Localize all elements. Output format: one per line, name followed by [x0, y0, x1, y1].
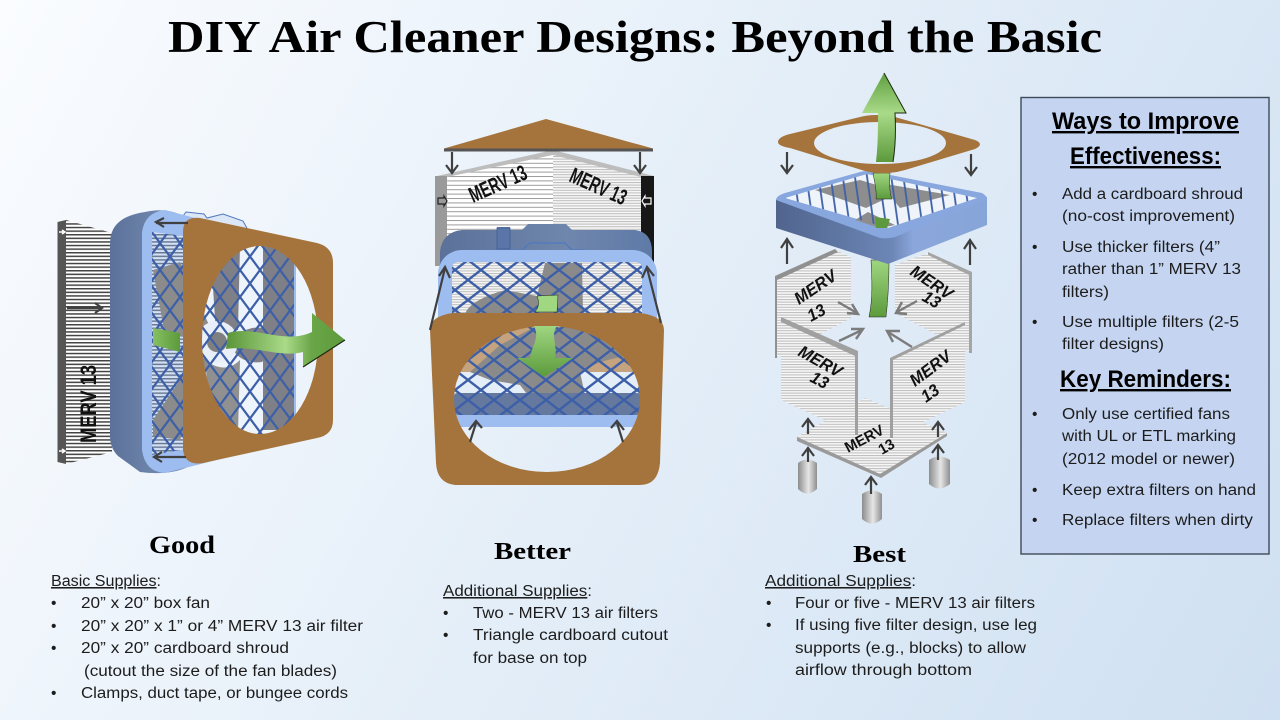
back left filter: MERV [791, 265, 842, 308]
leg supports [798, 456, 950, 524]
best supplies list: Four or five - MERV 13 air filters [795, 595, 1035, 612]
filter: MERV 13 single: MERV 13 [76, 365, 101, 443]
better supplies list: • [443, 605, 448, 622]
improvement list: (no-cost improvement) [1062, 208, 1235, 225]
best supplies list: • [766, 617, 771, 634]
airflow arrows [154, 218, 188, 462]
improvement list: Use thicker filters (4” [1062, 239, 1220, 256]
airflow arrows [430, 267, 661, 442]
good supplies list [51, 573, 363, 702]
back right filter: MERV [907, 262, 958, 304]
good supplies list: • [51, 685, 56, 702]
cardboard shroud [430, 313, 664, 485]
green arrow below fan [869, 260, 889, 317]
better supplies list: Two - MERV 13 air filters [473, 605, 658, 622]
good supplies list: 20” x 20” cardboard shroud [81, 640, 289, 657]
reminders list: Keep extra filters on hand [1062, 482, 1256, 499]
best design illustration [775, 73, 987, 524]
two v-shaped filters: MERV 13 [566, 163, 631, 210]
best supplies list: If using five filter design, use leg [795, 617, 1037, 634]
airflow arrows to fan and ring [781, 152, 977, 265]
improvement list: filter designs) [1062, 336, 1164, 353]
bottom filter: 13 [876, 436, 898, 458]
heading: key reminders: Key Reminders: [1060, 366, 1231, 393]
good supplies list: 20” x 20” box fan [81, 595, 210, 612]
reminders list: Only use certified fans [1062, 406, 1230, 423]
front left filter: MERV [795, 342, 847, 382]
front right filter: 13 [917, 380, 943, 406]
better supplies list: Triangle cardboard cutout [473, 627, 669, 644]
improvement list: filters) [1062, 284, 1109, 301]
box fan [776, 170, 987, 264]
better supplies list: for base on top [473, 650, 587, 667]
title: DIY Air Cleaner Designs: Beyond the Basic [168, 11, 1102, 62]
reminders list [1032, 406, 1256, 529]
green airflow arrow [226, 313, 345, 367]
cardboard top ring [778, 115, 980, 173]
box fan body [110, 210, 296, 473]
better supplies list: Additional Supplies : [443, 583, 592, 600]
heading: ways to improve: Ways to Improve [1052, 108, 1239, 135]
back left filter [775, 249, 851, 358]
reminders list: • [1032, 406, 1037, 423]
improvement list: Add a cardboard shroud [1062, 186, 1243, 203]
green arrow lower [517, 326, 573, 377]
bottom filter [797, 398, 947, 478]
front left filter [781, 317, 858, 435]
better heading: Better [494, 539, 571, 565]
good supplies list: 20” x 20” x 1” or 4” MERV 13 air filter [81, 618, 363, 635]
good supplies list: (cutout the size of the fan blades) [84, 663, 337, 680]
improvement list: • [1032, 186, 1037, 203]
best supplies list [765, 573, 1037, 679]
green arrow top [862, 73, 906, 162]
better design illustration [430, 119, 664, 485]
triangle cardboard cutout [444, 119, 653, 152]
reminders list: (2012 model or newer) [1062, 451, 1235, 468]
good supplies list: • [51, 618, 56, 635]
airflow arrows from below [802, 419, 944, 494]
back right filter [895, 252, 972, 353]
cardboard shroud [183, 218, 333, 463]
reminders list: • [1032, 512, 1037, 529]
better supplies list: • [443, 627, 448, 644]
front right filter: MERV [906, 346, 956, 390]
box fan [438, 224, 657, 427]
reminders list: with UL or ETL marking [1061, 428, 1236, 445]
green arrow upper [535, 295, 558, 312]
good heading: Good [149, 532, 215, 559]
front right filter [890, 322, 965, 438]
reminders list: Replace filters when dirty [1062, 512, 1253, 529]
better supplies list [443, 583, 669, 667]
two v-shaped filters: MERV 13 [465, 160, 531, 208]
good design illustration [58, 210, 345, 473]
inward arrows [838, 301, 917, 347]
improvement list: rather than 1” MERV 13 [1062, 261, 1241, 278]
good supplies list: • [51, 595, 56, 612]
good supplies list: Basic Supplies: [51, 573, 161, 590]
green arrow through fan [873, 173, 892, 199]
back right filter: 13 [919, 287, 945, 313]
two v-shaped filters [435, 150, 654, 266]
improvement list [1032, 186, 1243, 353]
improvement list: • [1032, 239, 1037, 256]
best supplies list: supports (e.g., blocks) to allow [795, 640, 1027, 657]
best supplies list: • [766, 595, 771, 612]
good supplies list: Clamps, duct tape, or bungee cords [81, 685, 348, 702]
improvement list: Use multiple filters (2-5 [1062, 314, 1239, 331]
heading: ways to improve [1052, 108, 1239, 170]
best supplies list: Additional Supplies : [765, 573, 916, 590]
back left filter: 13 [804, 300, 829, 326]
filter: MERV 13 single [58, 220, 112, 464]
front left filter: 13 [807, 368, 832, 393]
heading: ways to improve: Effectiveness: [1070, 143, 1221, 170]
best heading: Best [853, 542, 906, 568]
panel: ways to improve and key reminders [1021, 98, 1269, 554]
reminders list: • [1032, 482, 1037, 499]
improvement list: • [1032, 314, 1037, 331]
best supplies list: airflow through bottom [795, 662, 972, 679]
bottom filter: MERV [842, 422, 887, 457]
good supplies list: • [51, 640, 56, 657]
